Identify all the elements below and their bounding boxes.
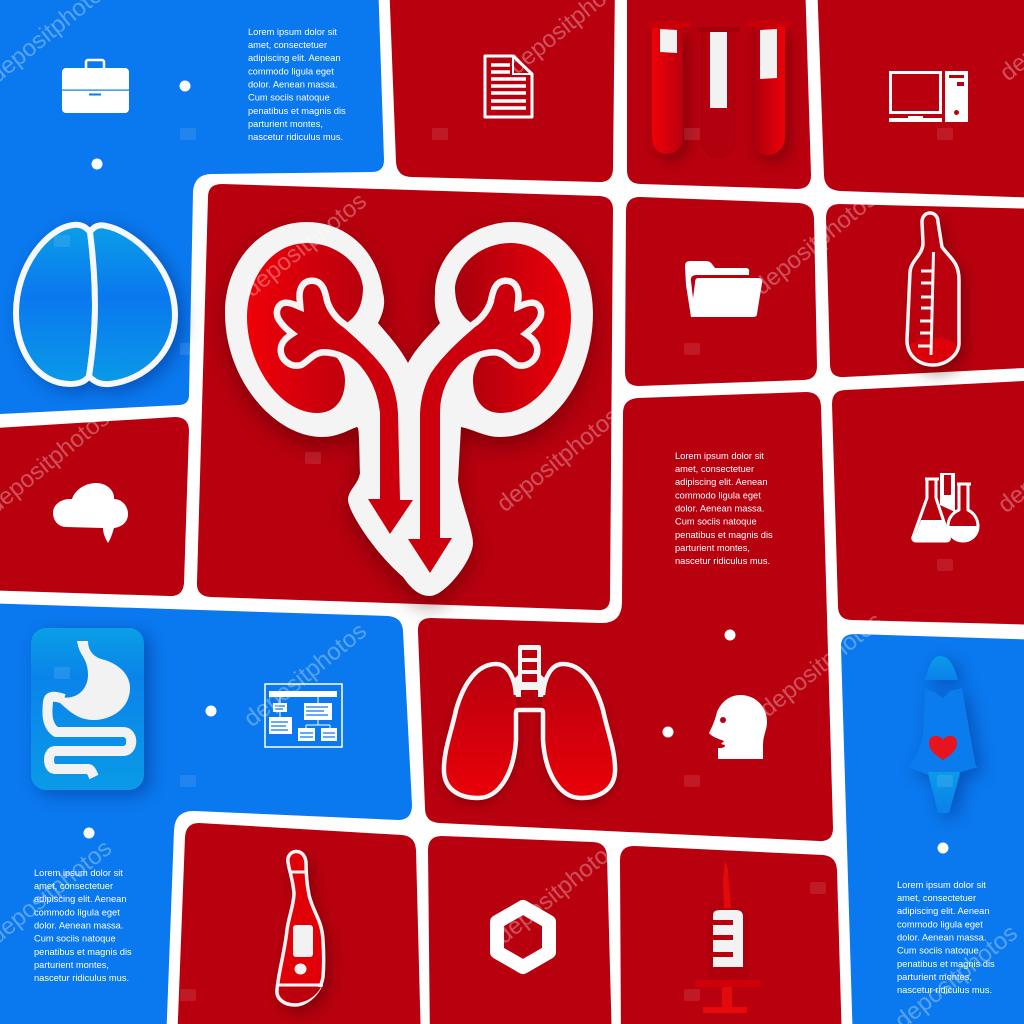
trachea [513, 645, 547, 697]
text block: top-left: dolor. Aenean massa. [248, 80, 337, 90]
right calyx, ureter and arrow [408, 284, 538, 573]
text block: lower-left: commodo ligula eget [34, 908, 120, 918]
icon: document [485, 56, 532, 117]
panel: flasks [832, 380, 1024, 625]
watermark text: depositphotos [491, 835, 624, 950]
panel: syringe [620, 846, 842, 1024]
dots: central panel [662, 630, 736, 738]
text block: lower-left: amet, consectetuer [34, 881, 113, 891]
text block: lower-left: Lorem ipsum dolor sit [34, 868, 123, 878]
panel: top-left blue [0, 0, 384, 415]
text block: top-left: parturient montes, [248, 119, 323, 129]
icon: hexagon [497, 907, 549, 967]
text block: top-left: Lorem ipsum dolor sit [248, 27, 337, 37]
text block: right: penatibus et magnis dis [897, 959, 995, 969]
watermark camera marks [54, 128, 953, 1001]
dots: top-left panel [92, 80, 190, 170]
lung outlines [444, 664, 615, 798]
icon: test tubes [647, 21, 791, 157]
icon: lungs [444, 645, 615, 798]
icon: kidneys and ureters [225, 222, 593, 596]
icon: lab flasks [913, 473, 978, 541]
panel: test tubes [627, 0, 811, 189]
text block: lower-left: adipiscing elit. Aenean [34, 894, 127, 904]
text block: top-left: commodo ligula eget [248, 66, 334, 76]
panel: large red L with text and lungs [418, 392, 833, 841]
text block: middle: commodo ligula eget [675, 490, 761, 500]
panel: cloud [0, 417, 189, 596]
text block: lower-left: penatibus et magnis dis [34, 947, 132, 957]
panel: folder [625, 197, 817, 386]
text block: middle: parturient montes, [675, 543, 750, 553]
icon: syringe [695, 860, 760, 1013]
text block: right: nascetur ridiculus mus. [897, 985, 992, 995]
text block: right: commodo ligula eget [897, 920, 983, 930]
text block: middle: dolor. Aenean massa. [675, 504, 764, 514]
text block: lower-left: dolor. Aenean massa. [34, 920, 123, 930]
text block: right: adipiscing elit. Aenean [897, 906, 990, 916]
text block: middle: Cum sociis natoque [675, 516, 757, 526]
kidney white sticker [225, 222, 593, 596]
left kidney red body [247, 243, 363, 413]
text block: right: Lorem ipsum dolor sit [897, 880, 986, 890]
text block: top-left: nascetur ridiculus mus. [248, 132, 343, 142]
dots: lower-left panel [84, 706, 216, 838]
heart [929, 736, 957, 760]
icon: nurse figure with heart [908, 656, 978, 814]
text block: middle: Lorem ipsum dolor sit [675, 451, 764, 461]
left calyx, ureter and arrow [280, 284, 413, 534]
text block: middle: amet, consectetuer [675, 464, 754, 474]
icon: folder [685, 261, 762, 317]
icon: stomach card [31, 628, 144, 790]
icon: brain [16, 225, 175, 384]
panel: right blue [841, 634, 1024, 1024]
icon: glass thermometer [907, 213, 959, 365]
text block: top-left: amet, consectetuer [248, 40, 327, 50]
icon: digital thermometer [277, 851, 324, 1005]
lung fills [444, 664, 615, 798]
dot: right panel [938, 842, 948, 854]
text block: middle: adipiscing elit. Aenean [675, 477, 768, 487]
text block: right: dolor. Aenean massa. [897, 932, 986, 942]
icon: flowchart [265, 684, 342, 747]
text block: middle: penatibus et magnis dis [675, 530, 773, 540]
panel: kidney [197, 184, 613, 610]
panel: computer [817, 0, 1024, 198]
icon: desktop computer [889, 71, 968, 122]
icon: briefcase [62, 60, 129, 113]
text block: top-left: adipiscing elit. Aenean [248, 53, 341, 63]
text block: top-left: penatibus et magnis dis [248, 106, 346, 116]
icon: cloud speech bubble [53, 483, 128, 543]
text block: lower-left: parturient montes, [34, 960, 109, 970]
icon: head profile [709, 695, 767, 759]
panel: digital thermometer [177, 823, 421, 1024]
panel: lower-left blue [0, 603, 412, 1024]
text block: top-left: Cum sociis natoque [248, 92, 330, 102]
text block: middle: nascetur ridiculus mus. [675, 556, 770, 566]
panel: document [389, 0, 615, 182]
text block: lower-left: Cum sociis natoque [34, 934, 116, 944]
right kidney red body [455, 243, 571, 413]
text block: lower-left: nascetur ridiculus mus. [34, 973, 129, 983]
text block: right: parturient montes, [897, 972, 972, 982]
watermark text: depositphotos [749, 186, 882, 301]
watermark text: depositphotos [239, 618, 372, 733]
text block: right: amet, consectetuer [897, 893, 976, 903]
text block: right: Cum sociis natoque [897, 946, 979, 956]
panel: hexagon [428, 836, 612, 1024]
watermark text: depositphotos [239, 188, 372, 303]
panel: glass thermometer [826, 204, 1024, 377]
watermark text: depositphotos [492, 403, 625, 518]
watermark text: depositphotos [755, 608, 888, 723]
